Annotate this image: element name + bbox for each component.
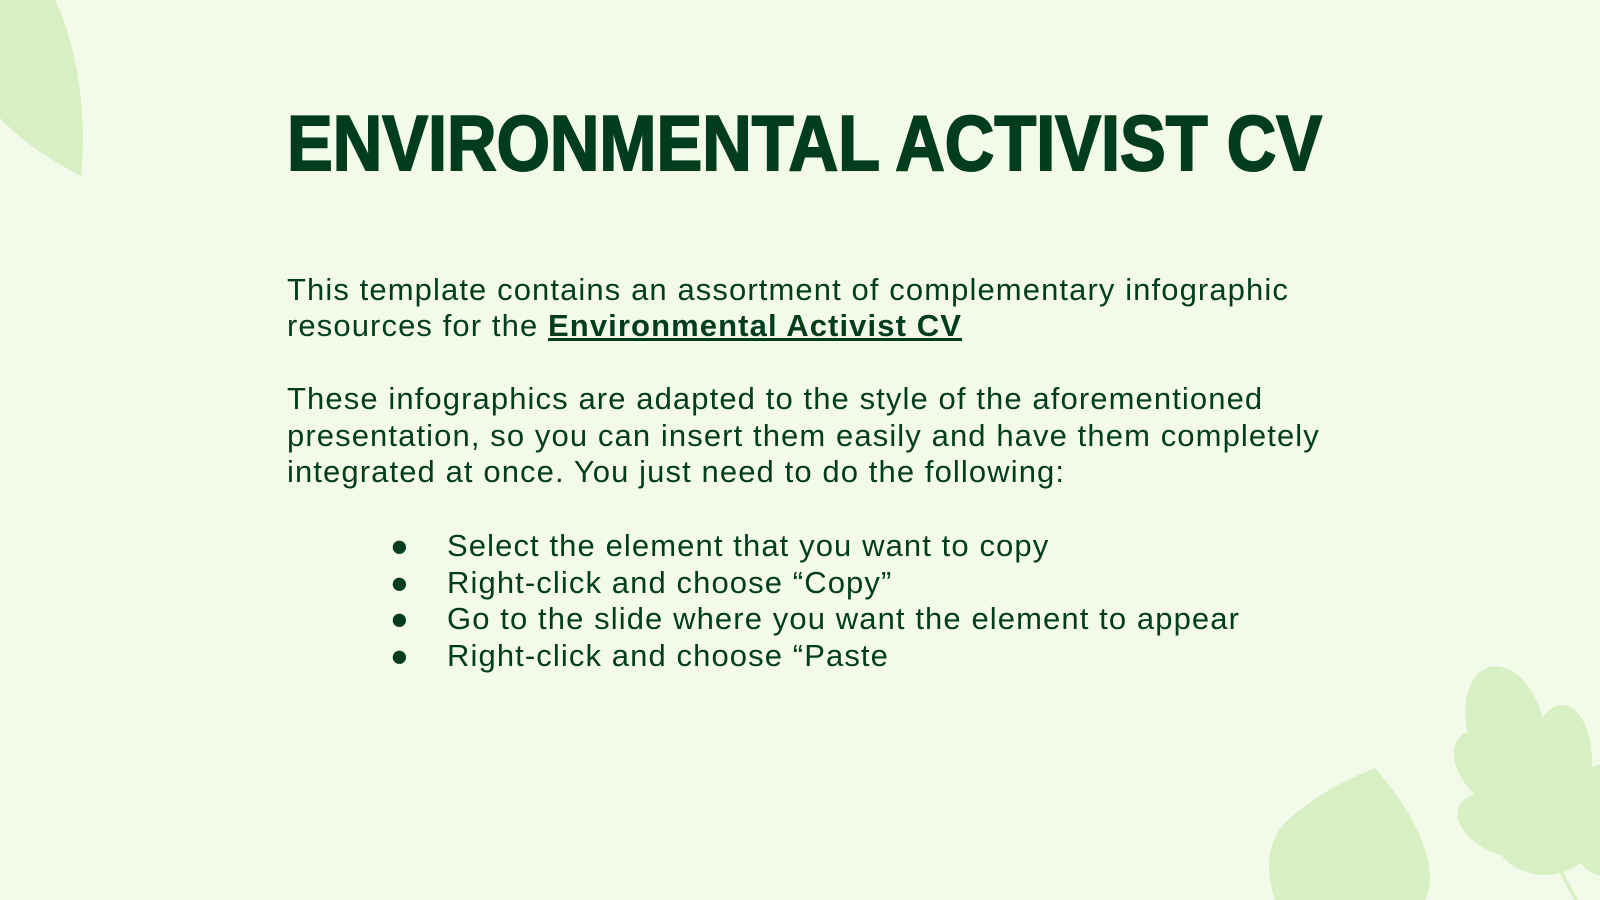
text block: intro: These infographics are adapted to the style of the aforementioned (287, 381, 1263, 416)
icon: heart leaf (1269, 768, 1430, 900)
text block: intro: integrated at once. You just need to do the following: (287, 454, 1065, 489)
text block: intro: Go to the slide where you want the element to appear (447, 601, 1240, 636)
text block: intro: This template contains an assortment of complementary infographic (287, 272, 1289, 307)
text block: intro: ● (390, 528, 409, 563)
text block: intro: ● (390, 601, 409, 636)
text block: intro: Right-click and choose “Paste (447, 638, 889, 673)
text block: intro (287, 272, 1320, 673)
icon: oak leaf (1440, 657, 1600, 900)
text block: intro: Right-click and choose “Copy” (447, 565, 892, 600)
icon: top-left leaf (0, 0, 83, 176)
text block: intro: Select the element that you want to copy (447, 528, 1049, 563)
text block: intro: resources for the Environmental Activist CV (287, 308, 962, 343)
title: ENVIRONMENTAL ACTIVIST CV (287, 99, 1322, 187)
text block: intro: ● (390, 638, 409, 673)
text block: intro: ● (390, 565, 409, 600)
text block: intro: presentation, so you can insert them easily and have them completely (287, 418, 1320, 453)
